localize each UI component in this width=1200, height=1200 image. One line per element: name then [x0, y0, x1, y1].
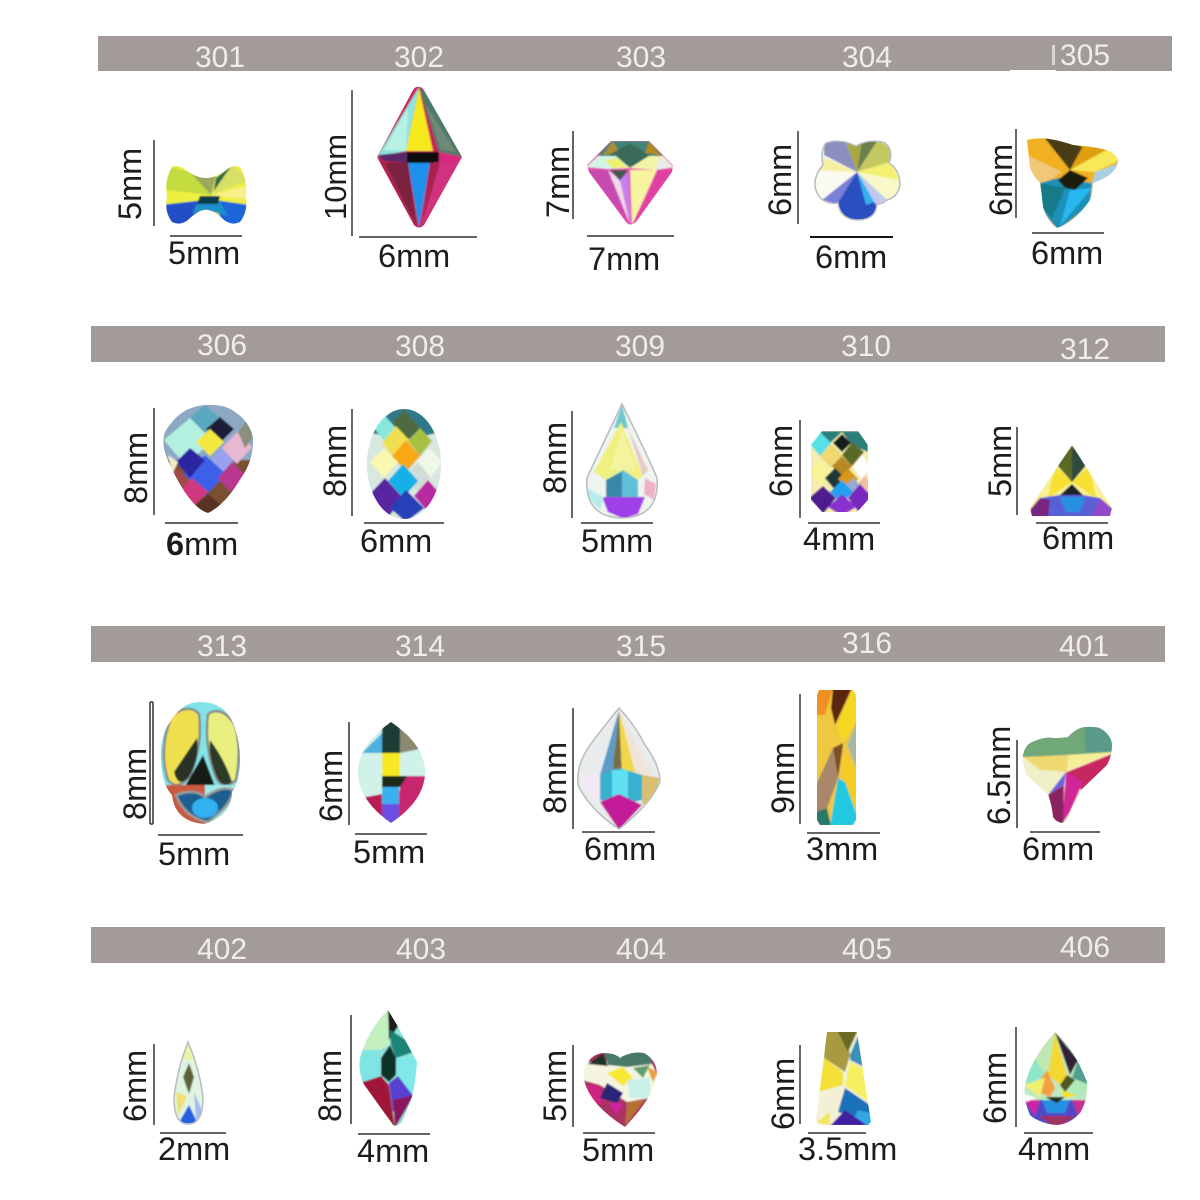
gem: leaf [578, 710, 660, 828]
product codes: 315 [616, 630, 666, 663]
product codes: 312 [1060, 333, 1110, 366]
dimension lines [352, 90, 477, 237]
width label: 6mm [584, 831, 656, 867]
dimension lines [573, 708, 655, 832]
gem: diamond [587, 141, 673, 224]
height label: 6mm [762, 144, 798, 216]
height label: 6mm [983, 144, 1019, 216]
gem: baguette [811, 431, 868, 512]
width label: 6mm [360, 523, 432, 559]
row 2 [91, 326, 1165, 562]
dimension lines [154, 140, 242, 236]
dimension lines [154, 1044, 226, 1133]
width label: 6mm [1022, 831, 1094, 867]
item 401 [987, 726, 1112, 860]
height label: 5mm [112, 148, 148, 220]
item 303 [546, 131, 674, 270]
item 308 [323, 409, 444, 552]
item 314 [319, 722, 427, 864]
item 406 [977, 1027, 1093, 1167]
gem: triangle [1030, 445, 1112, 516]
height label: 6mm [977, 1052, 1013, 1124]
item 304 [768, 131, 901, 268]
dimension lines [797, 131, 799, 224]
item 403 [318, 1010, 430, 1162]
width label: 6mm [166, 526, 238, 562]
dimension lines [352, 409, 444, 523]
height label: 8mm [537, 422, 573, 494]
width label: 4mm [803, 521, 875, 557]
height label: 10mm [318, 134, 353, 220]
height label: 6.5mm [981, 726, 1017, 825]
item 404 [544, 1045, 657, 1162]
product codes: 403 [396, 933, 446, 966]
item 306 [124, 404, 254, 556]
gem: trefoil [1027, 138, 1118, 228]
height label: 6mm [117, 1050, 153, 1122]
dimension lines [573, 131, 674, 236]
row 3 [91, 626, 1165, 872]
width label: 6mm [815, 239, 887, 275]
product codes: 310 [841, 330, 891, 363]
width label: 7mm [588, 241, 660, 277]
width label: 6mm [378, 238, 450, 274]
item 301 [118, 140, 246, 264]
dimension lines [1016, 129, 1104, 233]
height label: 9mm [765, 742, 801, 814]
product codes: 316 [842, 627, 892, 660]
width label: 5mm [158, 836, 230, 872]
product codes: 404 [616, 933, 666, 966]
height label: 8mm [317, 425, 353, 497]
dimension lines [1016, 1027, 1093, 1133]
item 312 [988, 427, 1112, 550]
row 4 [91, 927, 1165, 1169]
width label: 4mm [357, 1133, 429, 1169]
product codes: 309 [615, 330, 665, 363]
height label: 6mm [763, 425, 799, 497]
product codes: 401 [1059, 630, 1109, 663]
dimension lines [800, 694, 880, 833]
product codes [197, 931, 1110, 966]
gem: marquise [358, 722, 425, 823]
height label: 6mm [765, 1058, 801, 1130]
gem: flower [816, 142, 900, 220]
product codes: 306 [197, 329, 247, 362]
item 402 [123, 1040, 228, 1160]
width label: 3.5mm [798, 1131, 897, 1167]
height label: 6mm [313, 750, 349, 822]
width label: 6mm [1042, 520, 1114, 556]
item 405 [765, 1030, 897, 1167]
product codes: 406 [1060, 931, 1110, 964]
height label: 8mm [537, 742, 573, 814]
dimension lines [150, 702, 243, 835]
width label: 6mm [1031, 235, 1103, 271]
product codes: 303 [616, 41, 666, 74]
product codes: 308 [395, 330, 445, 363]
dimension lines [572, 411, 653, 523]
width label: 5mm [353, 834, 425, 870]
product codes: 302 [394, 41, 444, 74]
width label: 5mm [582, 1132, 654, 1168]
width label: 3mm [806, 831, 878, 867]
product codes: 301 [195, 41, 245, 74]
dimension lines [154, 408, 238, 523]
item 310 [763, 420, 880, 557]
product codes: 405 [842, 933, 892, 966]
height label: 8mm [117, 748, 153, 820]
gem: skull [160, 702, 240, 824]
height label: 8mm [118, 432, 154, 504]
product codes: 305 [1060, 39, 1110, 72]
height label: 7mm [540, 146, 576, 218]
item 316 [771, 690, 880, 860]
product codes [197, 627, 1109, 663]
gem: bow [166, 166, 246, 224]
gem: curved heart [1022, 726, 1112, 823]
gem: faceted drop [163, 404, 254, 513]
dimension lines [351, 1015, 430, 1134]
gem: flame [359, 1010, 417, 1126]
gem: slim drop [174, 1044, 202, 1124]
header bar [91, 326, 1165, 362]
item 302 [318, 85, 477, 274]
width label: 5mm [581, 523, 653, 559]
width label: 4mm [1018, 1131, 1090, 1167]
header bar [98, 36, 1172, 71]
height label: 5mm [982, 425, 1018, 497]
product codes: 314 [395, 630, 445, 663]
header bar [91, 927, 1165, 963]
dimension lines [800, 1045, 866, 1133]
gem: trapezoid [812, 1030, 876, 1130]
item 309 [543, 402, 658, 552]
height label: 8mm [312, 1050, 348, 1122]
gem: oval [367, 409, 441, 519]
width label: 2mm [158, 1131, 230, 1167]
gem: kite [377, 86, 462, 228]
header bar [91, 626, 1165, 662]
dimension lines [1017, 427, 1108, 523]
dimension lines [800, 420, 880, 523]
item 305 [989, 129, 1118, 264]
dimension lines [1017, 740, 1100, 832]
product codes: 304 [842, 41, 892, 74]
product codes: 313 [197, 630, 247, 663]
gem: long baguette [817, 690, 856, 825]
dimension lines [349, 722, 427, 834]
product codes [197, 329, 1110, 366]
product codes [195, 39, 1110, 74]
dimension lines [573, 1045, 655, 1133]
item 313 [117, 700, 244, 872]
width label: 5mm [168, 235, 240, 271]
gem: pear [588, 406, 656, 518]
row 1 [98, 36, 1172, 277]
gem: large drop [1020, 1030, 1092, 1130]
product codes: 402 [197, 933, 247, 966]
height label: 5mm [537, 1050, 573, 1122]
item 315 [543, 707, 661, 860]
gem: heart [584, 1052, 657, 1127]
